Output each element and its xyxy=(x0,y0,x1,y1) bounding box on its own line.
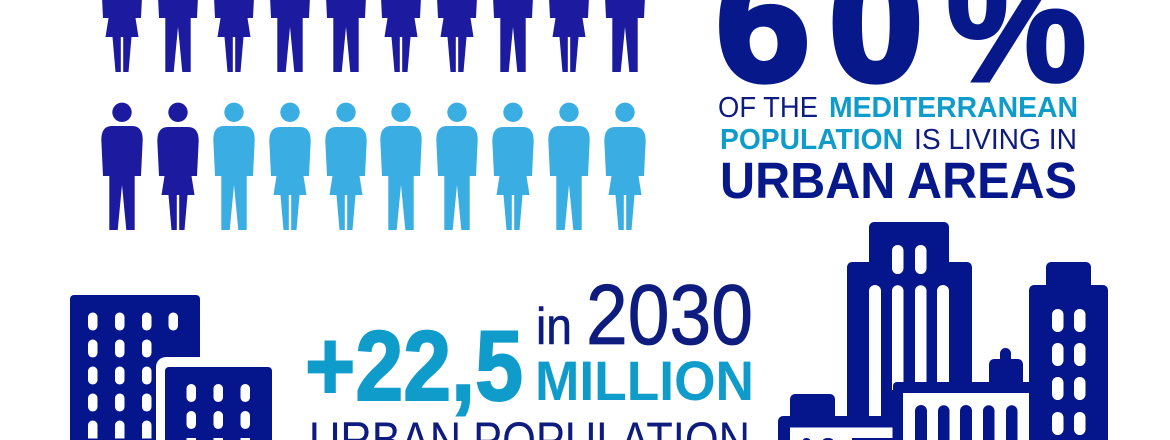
person 7 xyxy=(436,0,478,72)
main tower xyxy=(847,222,972,432)
text block: +22,5 million in 2030 xyxy=(305,268,754,440)
right tower windows xyxy=(1052,309,1086,435)
person 8 xyxy=(492,0,534,72)
light person 3 xyxy=(213,103,255,230)
front building with dome xyxy=(893,348,1032,440)
front building columns xyxy=(915,405,1018,440)
light person 4 xyxy=(269,103,311,230)
person 6 xyxy=(380,0,422,72)
person 3 xyxy=(213,0,255,72)
text block: urban share caption: POPULATION xyxy=(720,124,903,156)
person 10 xyxy=(604,0,646,72)
light person 5 xyxy=(325,103,367,230)
text block: urban share caption: OF THE xyxy=(718,92,818,124)
text block: +22,5 million in 2030: 2030 xyxy=(586,268,753,363)
tall building xyxy=(70,295,200,440)
text block: urban share caption: URBAN AREAS xyxy=(720,152,1077,209)
tall building windows xyxy=(88,312,178,438)
light person 10 xyxy=(604,103,646,230)
dark person 2 xyxy=(157,103,199,230)
icon: right city skyline xyxy=(778,222,1108,440)
person 2 xyxy=(157,0,199,72)
low building xyxy=(778,394,897,440)
person 4 xyxy=(269,0,311,72)
pictogram: second row, two dark and eight light people xyxy=(101,103,646,230)
text block: +22,5 million in 2030: in xyxy=(536,298,572,356)
headline: 60% xyxy=(716,0,1087,116)
building gap xyxy=(156,357,272,440)
text block: +22,5 million in 2030: MILLION xyxy=(535,349,754,412)
main tower vertical slots xyxy=(869,285,949,416)
person 9 xyxy=(548,0,590,72)
text block: +22,5 million in 2030: +22,5 xyxy=(305,310,523,421)
person 1 xyxy=(101,0,143,72)
person 5 xyxy=(325,0,367,72)
text block: urban share caption: MEDITERRANEAN xyxy=(829,92,1078,124)
right tower xyxy=(1029,262,1108,440)
pictogram: first row of ten dark people xyxy=(101,0,646,72)
light person 7 xyxy=(436,103,478,230)
light person 9 xyxy=(548,103,590,230)
front building interior xyxy=(903,393,1029,440)
main tower top windows xyxy=(892,245,926,274)
text block: urban share caption: IS LIVING IN xyxy=(914,124,1077,156)
light person 6 xyxy=(380,103,422,230)
dark person 1 xyxy=(101,103,143,230)
low building interior xyxy=(790,428,892,440)
icon: left office buildings xyxy=(70,295,272,440)
small building xyxy=(165,367,272,440)
light person 8 xyxy=(492,103,534,230)
low building window tops xyxy=(803,438,892,440)
small building windows xyxy=(186,384,250,440)
text block: urban share caption xyxy=(718,92,1078,209)
